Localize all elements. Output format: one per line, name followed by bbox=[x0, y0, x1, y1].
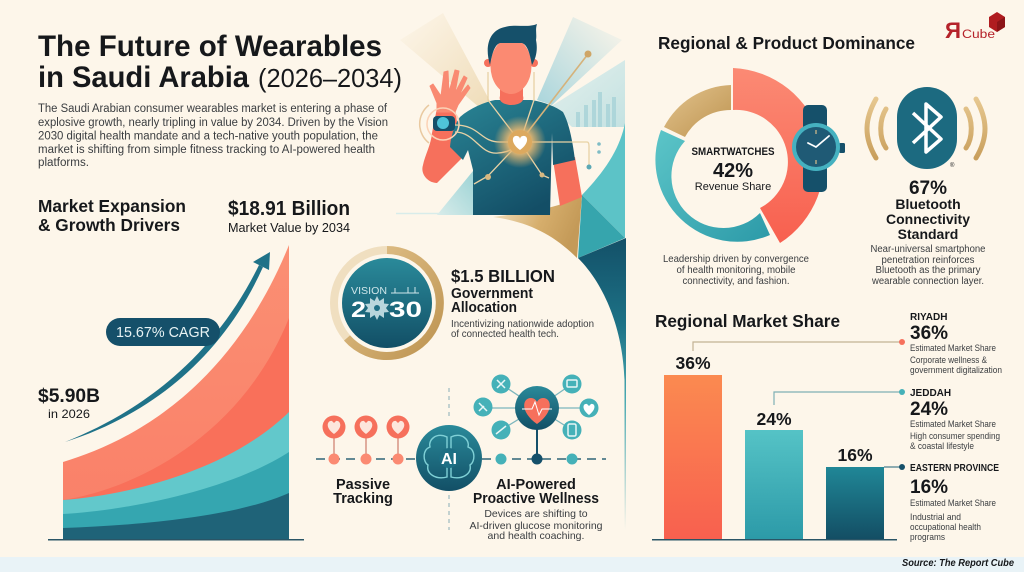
icon: smartwatch bbox=[792, 105, 845, 192]
heart node bbox=[494, 116, 546, 168]
legend: jeddah: Estimated Market Share bbox=[910, 419, 996, 430]
section heading: market expansion: & Growth Drivers bbox=[38, 215, 180, 235]
figure bbox=[422, 24, 582, 215]
legend: riyadh: 36% bbox=[910, 323, 948, 344]
bar chart: 16% bbox=[837, 445, 873, 465]
title: The Future of Wearables bbox=[38, 30, 382, 63]
AI brain bbox=[416, 425, 482, 491]
vision 2030 badge: VISION bbox=[351, 286, 387, 297]
text: donut caption: connectivity, and fashion. bbox=[682, 275, 790, 287]
legend: eastern province: EASTERN PROVINCE bbox=[910, 463, 999, 474]
title bbox=[38, 30, 402, 94]
stat: bluetooth 67%: 67% bbox=[909, 178, 947, 199]
donut chart: smartwatches: SMARTWATCHES bbox=[692, 146, 774, 158]
legend: eastern province bbox=[910, 463, 999, 543]
legend: riyadh: Corporate wellness & bbox=[910, 355, 988, 366]
text: donut caption: of health monitoring, mobile bbox=[676, 264, 796, 276]
donut chart: smartwatches: 42% bbox=[713, 160, 753, 182]
legend: jeddah bbox=[910, 388, 1000, 452]
legend: riyadh bbox=[910, 312, 1002, 376]
stat: 2026 value bbox=[38, 386, 100, 421]
title: in Saudi Arabia bbox=[38, 61, 249, 94]
intro paragraph bbox=[38, 103, 388, 169]
illustration: man with wearable health tech bbox=[396, 13, 626, 530]
stat: bluetooth 67%: Bluetooth as the primary bbox=[876, 265, 980, 276]
section heading: market expansion bbox=[38, 196, 186, 235]
area growth chart bbox=[48, 245, 304, 540]
AI brain: AI bbox=[441, 451, 457, 468]
intro paragraph: market is shifting from simple fitness tracking to AI-powered health bbox=[38, 144, 375, 156]
label: AI-powered proactive wellness: Devices are shifting to bbox=[484, 508, 588, 520]
logo: report cube bbox=[945, 12, 1005, 43]
heading: regional market share: Regional Market Share bbox=[655, 311, 840, 331]
AI wellness hub bbox=[474, 374, 598, 464]
growth arrow bbox=[65, 252, 270, 442]
legend: eastern province: programs bbox=[910, 532, 945, 543]
legend: eastern province: occupational health bbox=[910, 522, 981, 533]
legend: jeddah: & coastal lifestyle bbox=[910, 441, 974, 452]
government allocation text bbox=[451, 266, 594, 340]
CAGR pill bbox=[106, 318, 220, 346]
stat: bluetooth 67%: penetration reinforces bbox=[882, 255, 974, 266]
label: passive tracking: Tracking bbox=[333, 491, 393, 507]
legend: jeddah: JEDDAH bbox=[910, 388, 951, 399]
logo: report cube: Cube bbox=[962, 29, 995, 41]
government allocation text: Government bbox=[451, 286, 533, 302]
legend: riyadh: government digitalization bbox=[910, 365, 1002, 376]
footer strip bbox=[0, 557, 1024, 572]
legend: riyadh: Estimated Market Share bbox=[910, 343, 996, 354]
passive tracking icons bbox=[322, 416, 410, 464]
government allocation text: Incentivizing nationwide adoption bbox=[451, 318, 594, 330]
donut chart: smartwatches: Revenue Share bbox=[695, 181, 771, 193]
stat: bluetooth 67%: wearable connection layer. bbox=[871, 276, 984, 287]
stat: bluetooth 67% bbox=[870, 178, 986, 287]
vision 2030 badge bbox=[334, 250, 440, 356]
stat: bluetooth 67%: Connectivity bbox=[886, 211, 970, 227]
stat: market value 2034 bbox=[228, 198, 350, 235]
government allocation text: $1.5 BILLION bbox=[451, 266, 555, 286]
stat: 2026 value: $5.90B bbox=[38, 386, 100, 407]
legend: jeddah: High consumer spending bbox=[910, 431, 1000, 442]
bar chart: 36% bbox=[675, 353, 711, 373]
legend: eastern province: 16% bbox=[910, 477, 948, 498]
stat: bluetooth 67%: Bluetooth bbox=[895, 196, 961, 212]
stat: 2026 value: in 2026 bbox=[48, 407, 90, 421]
section heading: market expansion: Market Expansion bbox=[38, 196, 186, 216]
intro paragraph: 2030 digital health mandate and a tech-native youth population, the bbox=[38, 130, 378, 142]
intro paragraph: The Saudi Arabian consumer wearables market is entering a phase of bbox=[38, 103, 388, 115]
icon: bluetooth: ® bbox=[950, 162, 955, 169]
text: donut caption bbox=[663, 253, 809, 287]
text: donut caption: Leadership driven by convergence bbox=[663, 253, 809, 265]
label: AI-powered proactive wellness: Proactive Wellness bbox=[473, 491, 599, 507]
small nodes bbox=[485, 50, 601, 180]
label: AI-powered proactive wellness bbox=[469, 477, 603, 542]
label: passive tracking bbox=[333, 477, 393, 507]
vision 2030 badge: 30 bbox=[389, 297, 422, 322]
intro paragraph: explosive growth, nearly tripling in value by 2034. Driven by the Vision bbox=[38, 117, 388, 129]
legend: riyadh: RIYADH bbox=[910, 312, 947, 323]
label: AI-powered proactive wellness: and health coaching. bbox=[488, 530, 584, 542]
stat: market value 2034: Market Value by 2034 bbox=[228, 220, 350, 235]
legend: jeddah: 24% bbox=[910, 399, 948, 420]
legend: eastern province: Estimated Market Share bbox=[910, 498, 996, 509]
stat: bluetooth 67%: Near-universal smartphone bbox=[870, 244, 986, 255]
watch on wrist bbox=[420, 105, 459, 143]
label: AI-powered proactive wellness: AI-Powered bbox=[496, 477, 576, 493]
donut chart: smartwatches bbox=[655, 68, 824, 243]
label: passive tracking: Passive bbox=[336, 477, 390, 493]
heading: regional and product dominance: Regional & Product Dominance bbox=[658, 33, 915, 53]
vision 2030 badge: 2 bbox=[351, 297, 366, 322]
connectors bbox=[693, 339, 905, 470]
timeline: passive to AI-powered bbox=[316, 374, 606, 530]
logo: report cube: Я bbox=[945, 18, 961, 43]
government allocation text: Allocation bbox=[451, 300, 517, 316]
legend: eastern province: Industrial and bbox=[910, 512, 961, 523]
rays behind figure bbox=[396, 13, 625, 215]
title: (2026–2034) bbox=[258, 63, 402, 93]
government allocation text: of connected health tech. bbox=[451, 328, 559, 340]
label: AI-powered proactive wellness: AI-driven glucose monitoring bbox=[469, 520, 603, 532]
right corner teal shapes and gold swoosh bbox=[493, 123, 626, 530]
bar chart: 24% bbox=[756, 409, 792, 429]
CAGR pill: 15.67% CAGR bbox=[116, 325, 210, 341]
stat: market value 2034: $18.91 Billion bbox=[228, 198, 350, 220]
stat: bluetooth 67%: Standard bbox=[898, 226, 958, 242]
icon: bluetooth bbox=[867, 87, 985, 169]
intro paragraph: platforms. bbox=[38, 157, 89, 169]
data wires bbox=[455, 54, 589, 184]
bar chart bbox=[652, 353, 897, 540]
